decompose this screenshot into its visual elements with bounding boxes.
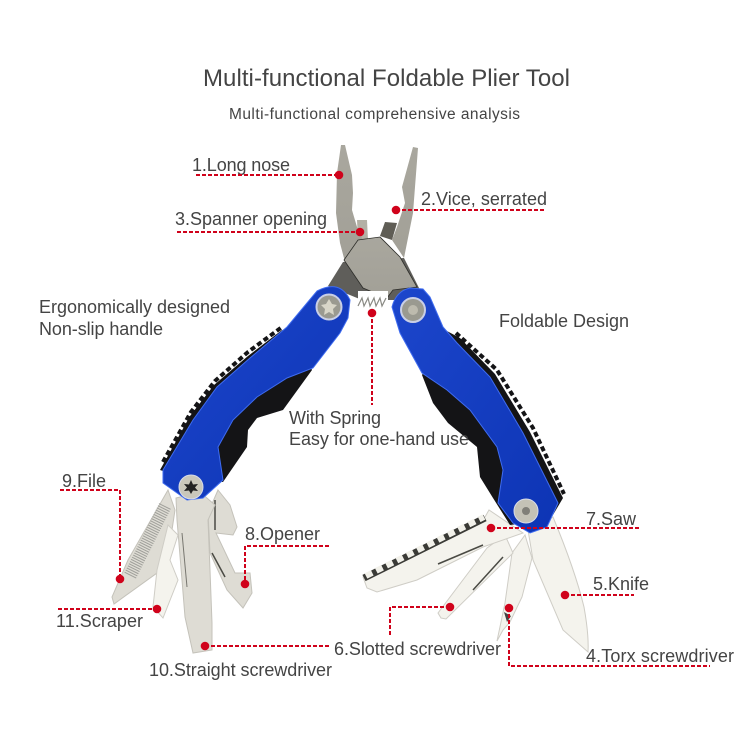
- right handle grip: [422, 330, 564, 525]
- callout: 7.Saw: 7.Saw: [586, 509, 637, 529]
- text: ergonomic handle: [39, 297, 230, 339]
- callout: 8.Opener: 8.Opener: [245, 524, 320, 544]
- callout: 3.Spanner opening: 3.Spanner opening: [175, 209, 327, 229]
- callout: 9.File: [60, 471, 124, 583]
- left tool: opener: [208, 490, 252, 608]
- spanner tabs: [357, 220, 368, 240]
- left handle blue: [163, 287, 350, 500]
- callout: 11.Scraper: 11.Scraper: [56, 611, 143, 631]
- right handle screw bottom: [514, 499, 538, 523]
- callout: 1.Long nose: 1.Long nose: [192, 155, 290, 175]
- right tool: slotted screwdriver: [438, 535, 513, 619]
- callout: 7.Saw: [487, 509, 640, 532]
- callout: spring: [289, 309, 469, 449]
- right tool: knife: [528, 517, 588, 652]
- callout: 9.File: 9.File: [62, 471, 106, 491]
- left handle grip: [160, 327, 312, 482]
- left handle screw bottom: [179, 475, 203, 499]
- left tool: scraper: [153, 525, 178, 618]
- callout: 2.Vice, serrated: [392, 189, 547, 214]
- left tool: straight screwdriver: [176, 492, 215, 653]
- callout: 6.Slotted screwdriver: 6.Slotted screwdriver: [334, 639, 501, 659]
- callout: 5.Knife: 5.Knife: [593, 574, 649, 594]
- left handle screw top: [316, 294, 342, 320]
- callout: 8.Opener: [241, 524, 329, 588]
- subtitle: Multi-functional comprehensive analysis: [229, 106, 520, 123]
- callout: 10.Straight screwdriver: [149, 642, 332, 680]
- right jaw: [392, 147, 418, 258]
- callout: 10.Straight screwdriver: 10.Straight screwdriver: [149, 660, 332, 680]
- pivot centre: [344, 237, 417, 298]
- illustration: foldable plier tool: [112, 145, 588, 653]
- callout: 3.Spanner opening: [175, 209, 364, 236]
- callout: 11.Scraper: [56, 605, 161, 631]
- left tool: file: [112, 490, 175, 604]
- spring: [358, 291, 388, 306]
- left jaw: [336, 145, 363, 262]
- right handle screw top: [401, 298, 425, 322]
- title: Multi-functional Foldable Plier Tool: [203, 65, 570, 92]
- right tool: saw: [363, 510, 523, 592]
- callout: 5.Knife: [561, 574, 649, 599]
- right handle blue: [392, 288, 558, 533]
- callout: spring: Easy for one-hand use: [289, 429, 469, 449]
- callout: 6.Slotted screwdriver: [334, 603, 501, 659]
- right tool: torx screwdriver: [497, 535, 532, 641]
- callout: 4.Torx screwdriver: [505, 604, 734, 666]
- text: ergonomic handle: Non-slip handle: [39, 319, 163, 339]
- callout: 1.Long nose: [192, 155, 343, 179]
- jaw arms dark: [328, 258, 420, 300]
- callout: 2.Vice, serrated: 2.Vice, serrated: [421, 189, 547, 209]
- text: ergonomic handle: Ergonomically designed: [39, 297, 230, 317]
- callout: spring: With Spring: [289, 408, 381, 428]
- text: foldable design: Foldable Design: [499, 311, 629, 331]
- callout: 4.Torx screwdriver: 4.Torx screwdriver: [586, 646, 734, 666]
